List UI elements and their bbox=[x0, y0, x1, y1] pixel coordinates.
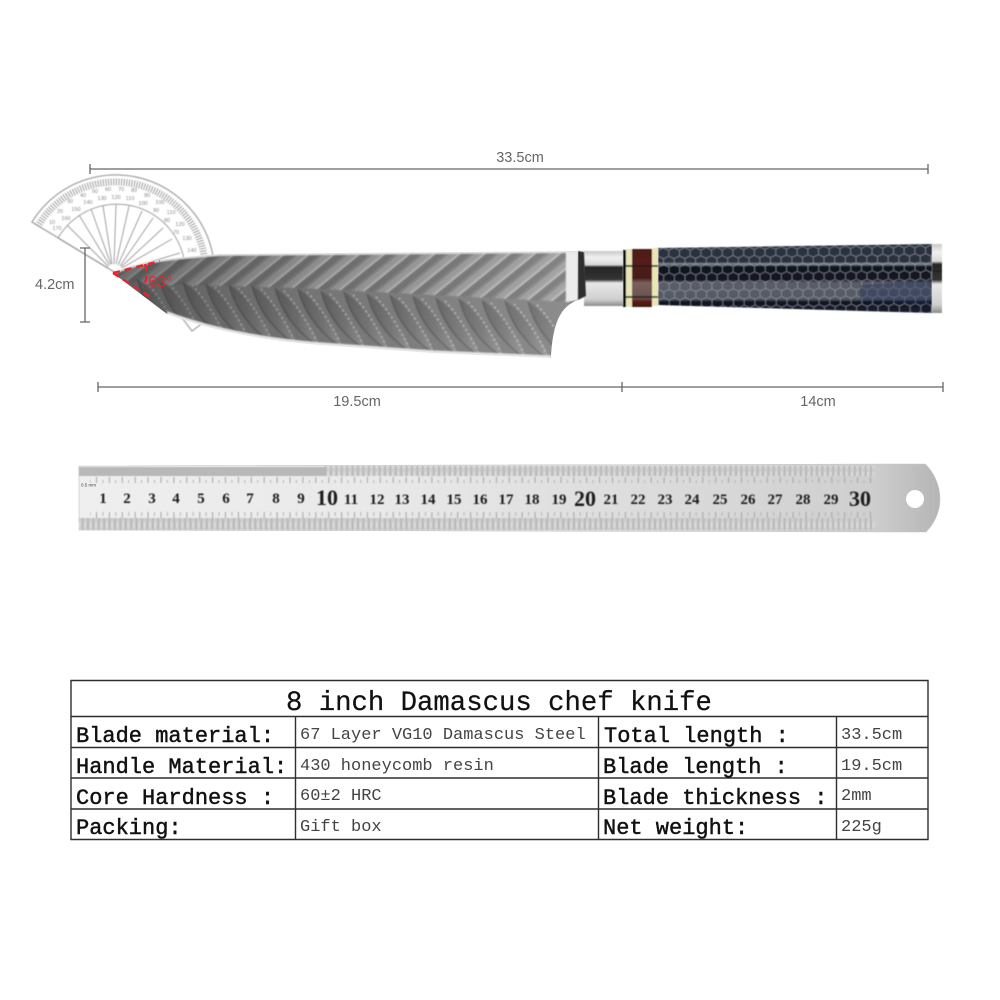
ruler body bbox=[79, 464, 940, 532]
icon: protractor: 140 bbox=[83, 200, 93, 206]
bolster bbox=[584, 251, 623, 306]
ruler numbers: 5 bbox=[197, 491, 205, 507]
ruler numbers: 11 bbox=[344, 492, 358, 508]
icon: protractor: 30 bbox=[67, 199, 73, 205]
ruler hole bbox=[906, 490, 924, 508]
ruler numbers: 25 bbox=[712, 492, 728, 508]
ruler numbers: 19 bbox=[552, 492, 566, 508]
ruler numbers: 21 bbox=[604, 492, 618, 508]
icon: protractor: 20 bbox=[57, 209, 63, 215]
icon: protractor: 150 bbox=[71, 207, 81, 213]
ruler numbers: 2 bbox=[123, 491, 131, 507]
row: blade material: Total length : bbox=[604, 724, 789, 749]
row: blade material: 33.5cm bbox=[841, 726, 902, 745]
ruler numbers: 13 bbox=[394, 492, 410, 508]
table grid bbox=[71, 680, 928, 840]
icon: protractor: 130 bbox=[182, 236, 192, 242]
ruler numbers: 14 bbox=[420, 492, 436, 508]
handle spacer rings bbox=[623, 248, 658, 307]
row: blade material bbox=[76, 724, 902, 749]
ruler numbers: 8 bbox=[272, 491, 280, 507]
icon: protractor: 120 bbox=[175, 222, 185, 228]
icon: protractor: 110 bbox=[126, 196, 134, 202]
bolster neck bbox=[578, 251, 586, 300]
ruler numbers: 18 bbox=[524, 492, 540, 508]
ruler numbers: 22 bbox=[630, 492, 646, 508]
icon: protractor: 70 bbox=[118, 187, 124, 193]
angle marker: 63 degrees: 63° bbox=[148, 274, 172, 291]
dimension: blade 19.5cm and handle 14cm: 19.5cm bbox=[333, 394, 381, 410]
row: packing: 225g bbox=[841, 818, 882, 837]
ruler numbers: 9 bbox=[297, 491, 305, 507]
ruler numbers: 23 bbox=[658, 492, 672, 508]
ruler numbers: 17 bbox=[498, 492, 514, 508]
icon: protractor: 120 bbox=[111, 195, 121, 201]
icon: protractor: 80 bbox=[131, 188, 137, 194]
icon: protractor: 90 bbox=[153, 208, 159, 214]
dimension: total length 33.5cm: 33.5cm bbox=[496, 150, 544, 166]
icon: protractor: 110 bbox=[167, 210, 175, 216]
ruler numbers: 6 bbox=[222, 491, 230, 507]
dimension: total length 33.5cm bbox=[90, 150, 928, 174]
blade: Damascus feather pattern bbox=[116, 251, 578, 358]
ruler top edge texture bbox=[79, 466, 875, 530]
row: core hardness: 60±2 HRC bbox=[300, 787, 382, 806]
row: core hardness: Core Hardness : bbox=[76, 786, 274, 811]
ruler numbers: 7 bbox=[246, 491, 254, 507]
ruler numbers: 1 bbox=[99, 491, 107, 507]
ruler numbers bbox=[99, 485, 871, 511]
icon: protractor: 170 bbox=[52, 226, 62, 232]
icon: protractor: 140 bbox=[187, 248, 197, 254]
icon: protractor: 80 bbox=[164, 218, 170, 224]
ruler numbers: 10 bbox=[316, 485, 338, 510]
ruler small print: 0.5 mm bbox=[81, 482, 96, 488]
row: packing: Net weight: bbox=[603, 816, 748, 841]
icon: protractor: 160 bbox=[61, 216, 71, 222]
ruler numbers: 30 bbox=[849, 486, 871, 511]
row: core hardness: 2mm bbox=[841, 787, 872, 806]
ruler numbers: 26 bbox=[740, 492, 756, 508]
row: blade material: Blade material: bbox=[76, 724, 274, 749]
dimension: blade height 4.2cm bbox=[35, 248, 90, 322]
handle: honeycomb resin bbox=[658, 244, 932, 313]
ruler numbers: 29 bbox=[824, 492, 838, 508]
row: core hardness: Blade thickness : bbox=[603, 786, 827, 811]
row: packing: Gift box bbox=[300, 818, 382, 837]
ruler numbers: 20 bbox=[574, 486, 596, 511]
row: handle material: 19.5cm bbox=[841, 757, 902, 776]
ruler bbox=[79, 464, 940, 532]
spec table bbox=[71, 680, 928, 841]
icon: protractor: 70 bbox=[173, 230, 179, 236]
icon: protractor: 10 bbox=[49, 220, 55, 226]
icon: protractor: 90 bbox=[144, 193, 150, 199]
ruler numbers: 12 bbox=[370, 492, 384, 508]
icon: protractor: 100 bbox=[138, 201, 148, 207]
row: handle material: Blade length : bbox=[603, 755, 788, 780]
ruler numbers: 27 bbox=[768, 492, 783, 508]
pommel cap bbox=[932, 244, 942, 313]
row: handle material: 430 honeycomb resin bbox=[300, 757, 494, 776]
icon: protractor: 100 bbox=[155, 200, 165, 206]
ruler numbers: 15 bbox=[446, 492, 462, 508]
icon: protractor: 130 bbox=[97, 196, 107, 202]
row: handle material: Handle Material: bbox=[76, 755, 287, 780]
ruler numbers: 28 bbox=[796, 492, 810, 508]
icon: protractor: 50 bbox=[92, 189, 98, 195]
row: core hardness bbox=[76, 786, 872, 811]
row: handle material bbox=[76, 755, 902, 780]
icon: protractor: 40 bbox=[80, 193, 86, 199]
dimension: blade 19.5cm and handle 14cm bbox=[98, 382, 943, 410]
icon: protractor bbox=[32, 175, 215, 331]
dimension: blade height 4.2cm: 4.2cm bbox=[35, 277, 74, 293]
table title: 8 inch Damascus chef knife bbox=[286, 688, 712, 719]
angle marker: 63 degrees bbox=[113, 261, 172, 298]
dimension: blade 19.5cm and handle 14cm: 14cm bbox=[800, 394, 836, 410]
icon: protractor: 60 bbox=[105, 187, 111, 193]
ruler numbers: 16 bbox=[472, 492, 488, 508]
row: packing: Packing: bbox=[76, 816, 182, 841]
ruler numbers: 4 bbox=[172, 491, 180, 507]
row: blade material: 67 Layer VG10 Damascus Steel bbox=[300, 726, 586, 745]
ruler numbers: 3 bbox=[148, 491, 156, 507]
ruler numbers: 24 bbox=[684, 492, 700, 508]
row: packing bbox=[76, 816, 882, 841]
